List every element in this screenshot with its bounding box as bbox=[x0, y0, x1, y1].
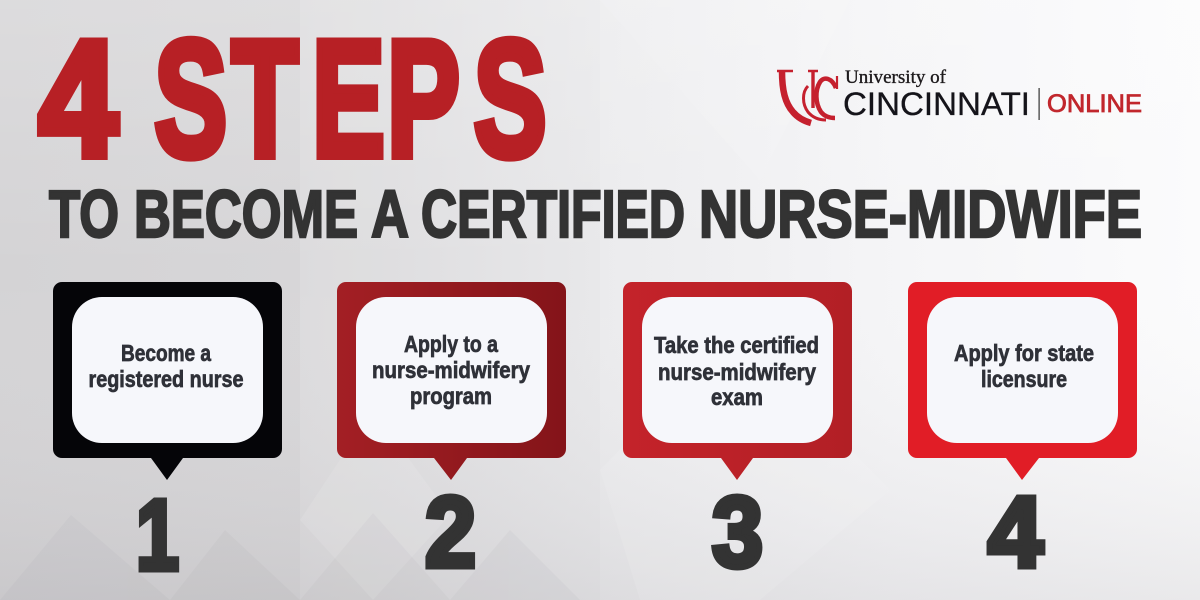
numeral 3: 3 bbox=[712, 476, 763, 588]
text panel 3 bbox=[642, 297, 833, 443]
logo text: Online: ONLINE bbox=[1047, 90, 1142, 118]
numeral 4: 4 bbox=[988, 476, 1043, 588]
step 4 text: licensure bbox=[981, 366, 1067, 392]
callout frame 4 bbox=[908, 282, 1137, 480]
subtitle: A bbox=[371, 177, 409, 252]
text panel 2 bbox=[356, 297, 547, 443]
step 2 bbox=[337, 282, 566, 588]
step 2 text: Apply to a bbox=[404, 331, 498, 357]
numeral 1: 1 bbox=[136, 480, 179, 592]
icon: UC monogram bbox=[777, 71, 837, 123]
text panel 4 bbox=[927, 297, 1118, 443]
step 4 bbox=[908, 282, 1137, 588]
subtitle: BECOME bbox=[134, 177, 358, 252]
step 3 text bbox=[654, 332, 819, 410]
step 3 text: nurse-midwifery bbox=[658, 359, 816, 385]
logo: University of Cincinnati Online bbox=[777, 68, 1142, 123]
title: 4 STEPS: STEPS bbox=[154, 6, 547, 191]
step 3 bbox=[623, 282, 852, 588]
step 1 text bbox=[88, 340, 244, 392]
callout frame 1 bbox=[53, 282, 282, 480]
title: 4 STEPS: 4 bbox=[39, 6, 118, 191]
step 2 text: program bbox=[410, 383, 492, 409]
step 3 text: Take the certified bbox=[654, 332, 819, 358]
step 4 text bbox=[954, 340, 1094, 392]
logo text: Cincinnati: CINCINNATI bbox=[843, 86, 1030, 122]
step 1 text: registered nurse bbox=[88, 366, 244, 392]
numeral 2: 2 bbox=[425, 476, 476, 588]
callout frame 2 bbox=[337, 282, 566, 480]
step 2 text: nurse-midwifery bbox=[372, 357, 530, 383]
step 3 text: exam bbox=[711, 384, 763, 410]
subtitle bbox=[49, 177, 1142, 252]
step 1 bbox=[53, 282, 282, 592]
logo text: University of: University of bbox=[845, 68, 947, 88]
text panel 1 bbox=[72, 297, 263, 443]
callout frame 3 bbox=[623, 282, 852, 480]
step 1 text: Become a bbox=[121, 340, 211, 366]
subtitle: TO bbox=[49, 177, 119, 252]
subtitle: CERTIFIED bbox=[421, 177, 685, 252]
step 2 text bbox=[372, 331, 530, 409]
step 4 text: Apply for state bbox=[954, 340, 1094, 366]
